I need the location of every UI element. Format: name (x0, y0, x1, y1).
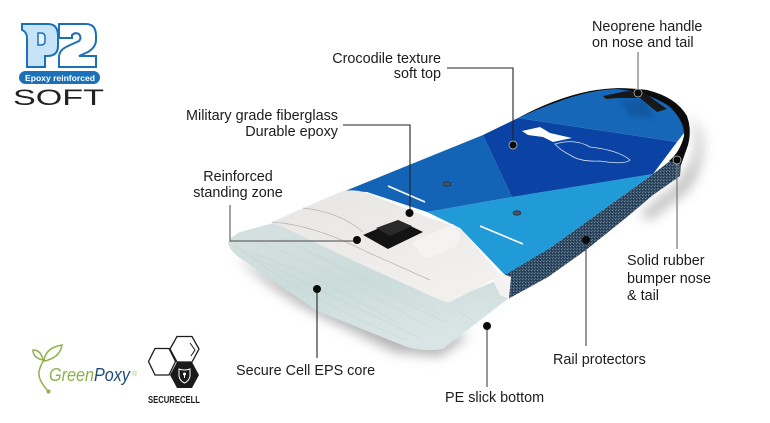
label: Neoprene handle: Neoprene handle (592, 19, 702, 35)
logo: GreenPoxy: ® (132, 370, 138, 378)
logo letter P (22, 24, 58, 67)
logo: SecureCell (148, 336, 200, 406)
screws (443, 182, 521, 215)
SECURECELL wordmark: SECURECELL (148, 395, 200, 406)
deck top: mid blue tail section (345, 135, 512, 212)
label: Solid rubber bumper nose and tail: bumper nose (627, 271, 711, 287)
logo numeral 2 (59, 24, 96, 67)
logo word SOFT: SOFT (13, 85, 104, 110)
surfboard illustration (228, 88, 702, 356)
label: Reinforced standing zone: standing zone (193, 185, 283, 201)
deck top: dark blue centre (483, 118, 677, 197)
pad tab (412, 224, 460, 258)
leader: rail protectors (582, 236, 590, 346)
label: Solid rubber bumper nose and tail (627, 156, 711, 304)
leader: crocodile texture (447, 68, 517, 149)
deck top: light blue section (427, 174, 653, 275)
foam shadow (236, 256, 470, 356)
label: Crocodile texture soft top: Crocodile texture (332, 51, 441, 67)
leader: fiberglass (343, 125, 414, 217)
standing pad (272, 190, 498, 302)
bumper nose (518, 88, 690, 165)
label: Reinforced standing zone: Reinforced (203, 169, 273, 185)
nose shadow (640, 112, 702, 220)
label: Military grade fiberglass Durable epoxy (186, 108, 414, 217)
logo: GreenPoxy (33, 345, 138, 393)
foam core (228, 222, 509, 350)
label: Crocodile texture soft top (332, 51, 517, 149)
label: Military grade fiberglass Durable epoxy: Military grade fiberglass (186, 108, 338, 124)
black grip patch (363, 220, 423, 249)
leader: slick bottom (483, 322, 491, 387)
rail protector (505, 161, 681, 299)
label: Secure Cell EPS core: Secure Cell EPS core (236, 363, 375, 379)
deck stripes (388, 186, 523, 244)
neoprene handle (603, 91, 667, 112)
leader: rubber bumper (673, 156, 681, 249)
logo pill: Epoxy reinforced (25, 73, 95, 83)
leader: standing zone (230, 205, 361, 244)
handle shadow (620, 100, 655, 118)
label: Solid rubber bumper nose and tail: & tail (627, 288, 659, 304)
label: Crocodile texture soft top: soft top (394, 66, 441, 82)
label: Secure Cell EPS core (236, 285, 375, 379)
label: Rail protectors (553, 236, 646, 368)
icon: hexagon cells (148, 336, 199, 388)
label: PE slick bottom (445, 322, 544, 406)
logo: P2 Epoxy reinforced SOFT (13, 24, 104, 110)
deck top: nose section (518, 88, 688, 142)
label: Solid rubber bumper nose and tail: Solid rubber (627, 253, 705, 269)
label: Neoprene handle (592, 19, 702, 97)
label: Reinforced standing zone (193, 169, 361, 244)
label: Military grade fiberglass Durable epoxy: Durable epoxy (245, 124, 339, 140)
white rail strap (493, 272, 511, 299)
label: Rail protectors: Rail protectors (553, 352, 646, 368)
GreenPoxy wordmark: GreenPoxy (49, 365, 131, 385)
icon: sprout (33, 345, 62, 393)
label: PE slick bottom: PE slick bottom (445, 390, 544, 406)
label: Neoprene handle: on nose and tail (592, 35, 694, 51)
leader: neoprene handle (634, 52, 642, 97)
leader: EPS core (313, 285, 321, 358)
NSP logo mark (522, 127, 630, 163)
